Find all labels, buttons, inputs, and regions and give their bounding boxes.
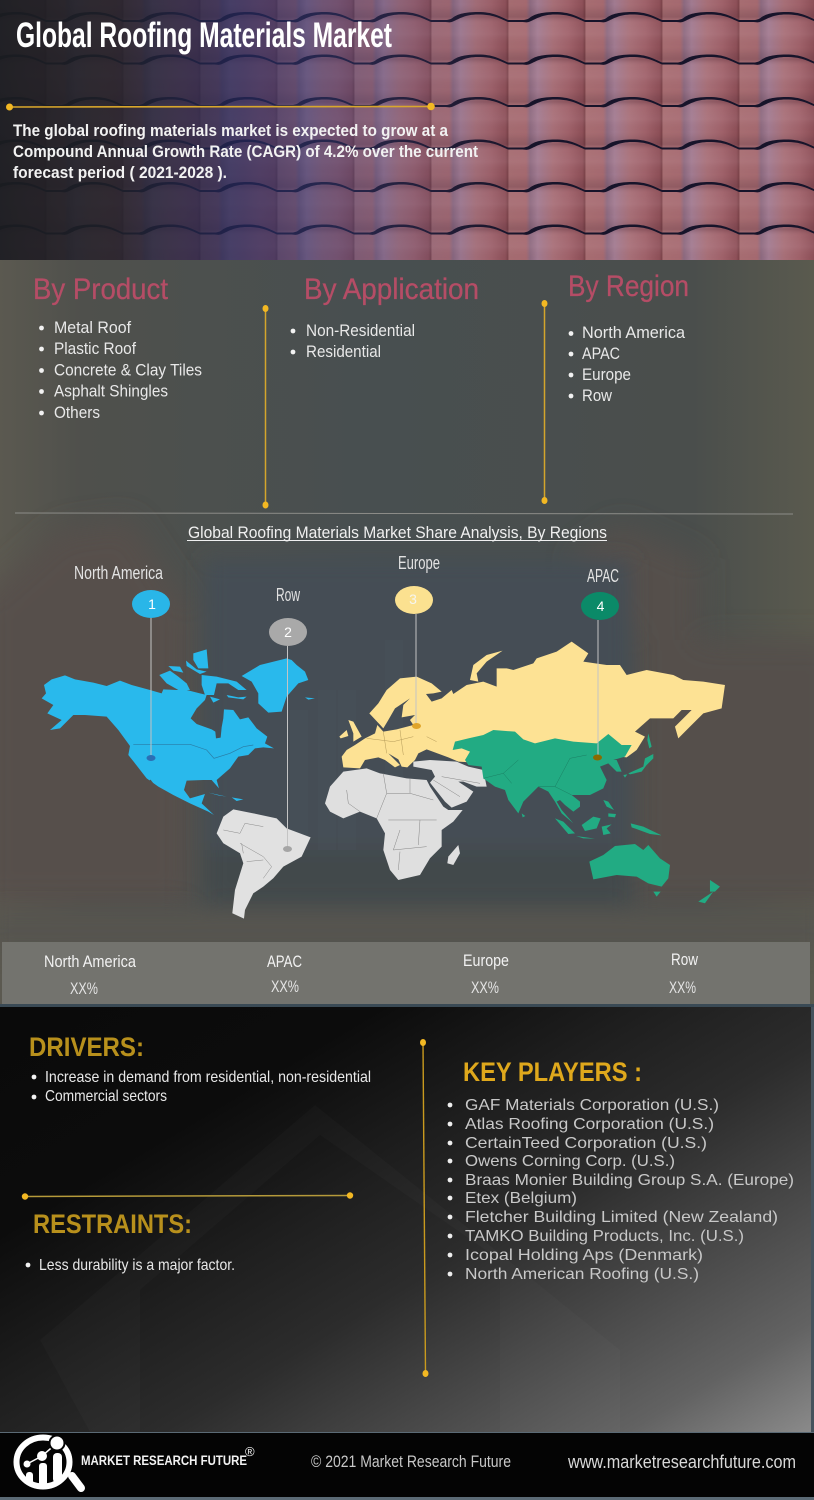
gold divider vertical (420, 1039, 428, 1377)
intro text (13, 121, 478, 182)
panel: By Product (33, 273, 202, 422)
application list: Residential (306, 342, 381, 361)
panel: regional share table (2, 942, 810, 1004)
map: North America (42, 649, 315, 815)
key players list: GAF Materials Corporation (U.S.) (465, 1097, 719, 1114)
map: Africa and Middle East (325, 760, 487, 880)
map pin 3: Europe: Europe (398, 553, 440, 573)
panel: roof header (0, 0, 814, 260)
panel: regional share table: APAC (267, 953, 302, 971)
heading: By Region (568, 270, 689, 303)
map: South America (217, 809, 311, 919)
panel: regional share table: Europe (463, 952, 509, 970)
application list: Non-Residential (306, 321, 415, 340)
intro text: The global roofing materials market is expected to grow at a (13, 121, 448, 140)
intro text: Compound Annual Growth Rate (CAGR) of 4.2% over the current (13, 142, 478, 161)
product list (39, 318, 202, 422)
map pin 4: APAC: APAC (587, 566, 619, 586)
gold divider horizontal (22, 1192, 353, 1200)
product list: Asphalt Shingles (54, 382, 168, 400)
divider: application / region (542, 300, 548, 504)
application list (291, 321, 415, 361)
chart subtitle: Global Roofing Materials Market Share Analysis, By Regions (188, 523, 607, 542)
product list: Concrete & Clay Tiles (54, 360, 202, 380)
panel: By Region (568, 270, 689, 405)
map pin 1: North America (74, 563, 170, 761)
map: Europe and Russia (339, 642, 725, 768)
key players list: Icopal Holding Aps (Denmark) (465, 1247, 703, 1264)
key players list: Fletcher Building Limited (New Zealand) (465, 1209, 778, 1226)
divider: product / application (262, 305, 268, 508)
map pin 2: Row (269, 585, 307, 852)
gold divider (6, 103, 435, 110)
panel: regional share table: XX% (271, 978, 299, 996)
heading: By Application (304, 273, 479, 306)
restraints heading: RESTRAINTS: (33, 1209, 192, 1239)
map pin 1: North America: 1 (148, 596, 156, 612)
map pin 3: Europe (395, 553, 440, 729)
restraints list: Less durability is a major factor. (39, 1257, 235, 1274)
key players list: CertainTeed Corporation (U.S.) (465, 1135, 707, 1152)
panel: segments and map background (0, 260, 814, 1006)
product list: Others (54, 403, 100, 422)
panel: regional share table: XX% (70, 980, 98, 998)
panel: regional share table: North America (44, 953, 137, 971)
key players list: Atlas Roofing Corporation (U.S.) (465, 1116, 714, 1133)
panel: drivers, restraints, key players (0, 1007, 814, 1432)
region list: North America (582, 323, 686, 342)
map pin 3: Europe: 3 (409, 591, 417, 607)
intro text: forecast period ( 2021-2028 ). (13, 163, 227, 182)
key players list: Braas Monier Building Group S.A. (Europe) (465, 1172, 794, 1189)
panel: regional share table: Row (671, 951, 698, 969)
map pin 2: Row: 2 (284, 624, 292, 640)
panel: footer (0, 1432, 814, 1500)
registered mark: ® (245, 1444, 255, 1459)
product list: Plastic Roof (54, 339, 136, 358)
region list: Row (582, 386, 613, 405)
key players list: North American Roofing (U.S.) (465, 1266, 699, 1283)
key players list: TAMKO Building Products, Inc. (U.S.) (465, 1228, 744, 1245)
website: www.marketresearchfuture.com (567, 1452, 796, 1472)
key players list (448, 1097, 794, 1283)
product list: Metal Roof (54, 318, 131, 337)
key players list: Owens Corning Corp. (U.S.) (465, 1153, 675, 1170)
map: Asia Pacific (453, 730, 670, 897)
roof tile photo background (0, 0, 814, 260)
panel: regional share table: XX% (471, 979, 499, 997)
map pin 4: APAC (581, 566, 619, 760)
brand name: MARKET RESEARCH FUTURE (81, 1453, 247, 1468)
copyright: © 2021 Market Research Future (311, 1452, 511, 1471)
region list: APAC (582, 344, 620, 363)
map pin 2: Row: Row (276, 585, 301, 605)
panel: regional share table: XX% (669, 979, 696, 997)
drivers list (32, 1069, 371, 1105)
key players heading: KEY PLAYERS : (463, 1057, 642, 1087)
map pin 4: APAC: 4 (597, 598, 605, 614)
title: Global Roofing Materials Market (16, 16, 392, 55)
key players list: Etex (Belgium) (465, 1190, 577, 1207)
panel: By Application (291, 273, 479, 361)
world map (42, 642, 725, 919)
drivers list: Commercial sectors (45, 1088, 167, 1105)
map: New Zealand (698, 880, 720, 903)
logo: magnifier with bars (16, 1436, 81, 1488)
region list (569, 323, 686, 405)
drivers heading: DRIVERS: (29, 1032, 144, 1062)
drivers list: Increase in demand from residential, non-residential (45, 1069, 371, 1086)
map pin 1: North America: North America (74, 563, 164, 583)
region list: Europe (582, 365, 631, 384)
heading: By Product (33, 273, 169, 306)
